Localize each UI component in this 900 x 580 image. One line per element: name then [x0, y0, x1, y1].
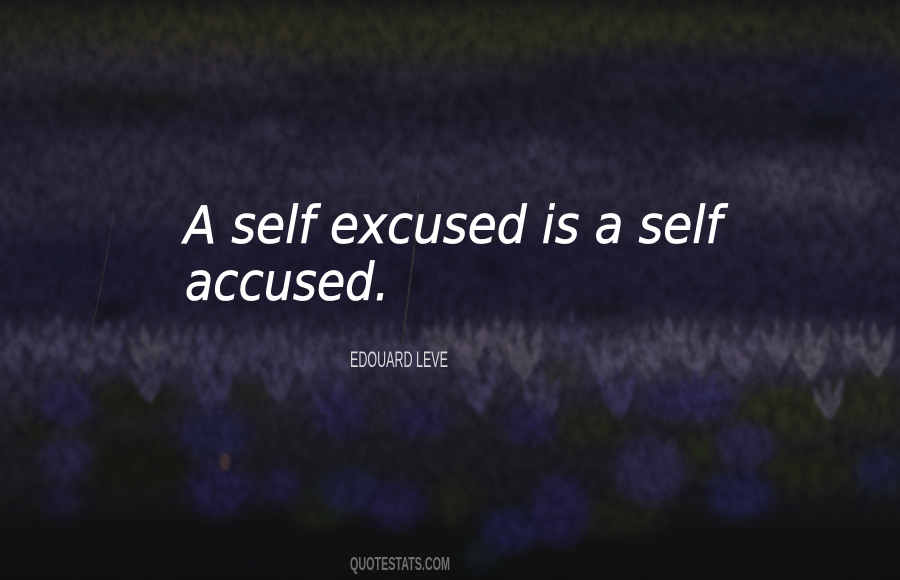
watermark: QUOTESTATS.COM: [350, 554, 450, 574]
dark green grass band: [20, 365, 900, 535]
quote text: accused.: [185, 253, 389, 313]
quote text: [181, 196, 728, 313]
front row blurred purple flowers: [40, 381, 900, 569]
orange flower centre highlight: [220, 454, 230, 470]
flower band glow: [380, 320, 900, 380]
back row crocus flowers: [0, 310, 894, 428]
thin dry grass stalks: [78, 195, 418, 385]
author name: EDOUARD LEVE: [350, 347, 448, 372]
quote text: A self excused is a self: [181, 196, 728, 256]
